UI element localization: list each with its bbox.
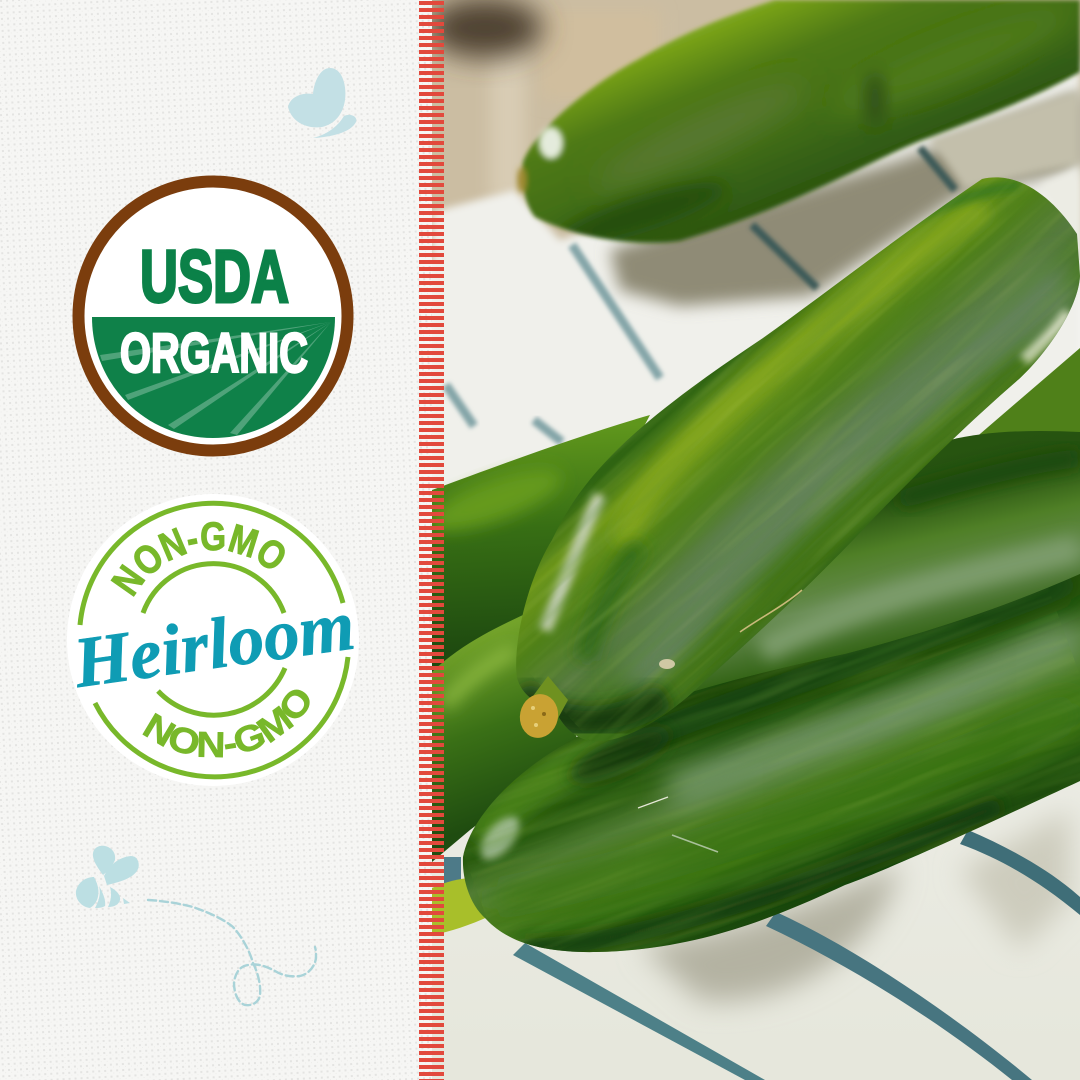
cucumber: lower left — [432, 614, 580, 862]
cucumber: upper left — [422, 415, 650, 680]
cucumber: top blurred — [517, 0, 1080, 260]
badge: USDA Organic — [78, 182, 348, 450]
badge text: top Non-GMO: NON-GMO — [110, 522, 285, 597]
badge text: bottom Non-GMO: NON-GMO — [142, 690, 310, 758]
badge white backing — [67, 494, 359, 786]
cucumber: bottom — [432, 574, 1080, 952]
decorative red stripe column — [419, 0, 444, 1080]
badge wordmark: ORGANIC: ORGANIC — [120, 321, 308, 384]
cucumber: main centre — [516, 177, 1080, 740]
panel: linen background — [0, 0, 432, 1080]
panel: cucumber photo — [373, 0, 1080, 1080]
bee body and wings — [76, 846, 139, 908]
badge field rays — [100, 322, 331, 435]
badge wordmark: USDA: USDA — [140, 235, 289, 318]
flight path — [148, 900, 316, 1005]
badge: Non-GMO Heirloom — [67, 494, 359, 786]
cucumber: back right — [680, 348, 1080, 705]
icon: butterfly — [288, 68, 356, 138]
towel — [432, 60, 1080, 1080]
towel stripes — [444, 148, 1080, 1080]
badge rings — [80, 503, 348, 777]
badge field: green half circle — [92, 317, 335, 438]
wooden table — [427, 0, 1080, 260]
icon: bee with dashed flight path — [76, 846, 316, 1005]
cucumber stem tip — [520, 676, 568, 738]
badge script: Heirloom: Heirloom — [68, 585, 359, 703]
